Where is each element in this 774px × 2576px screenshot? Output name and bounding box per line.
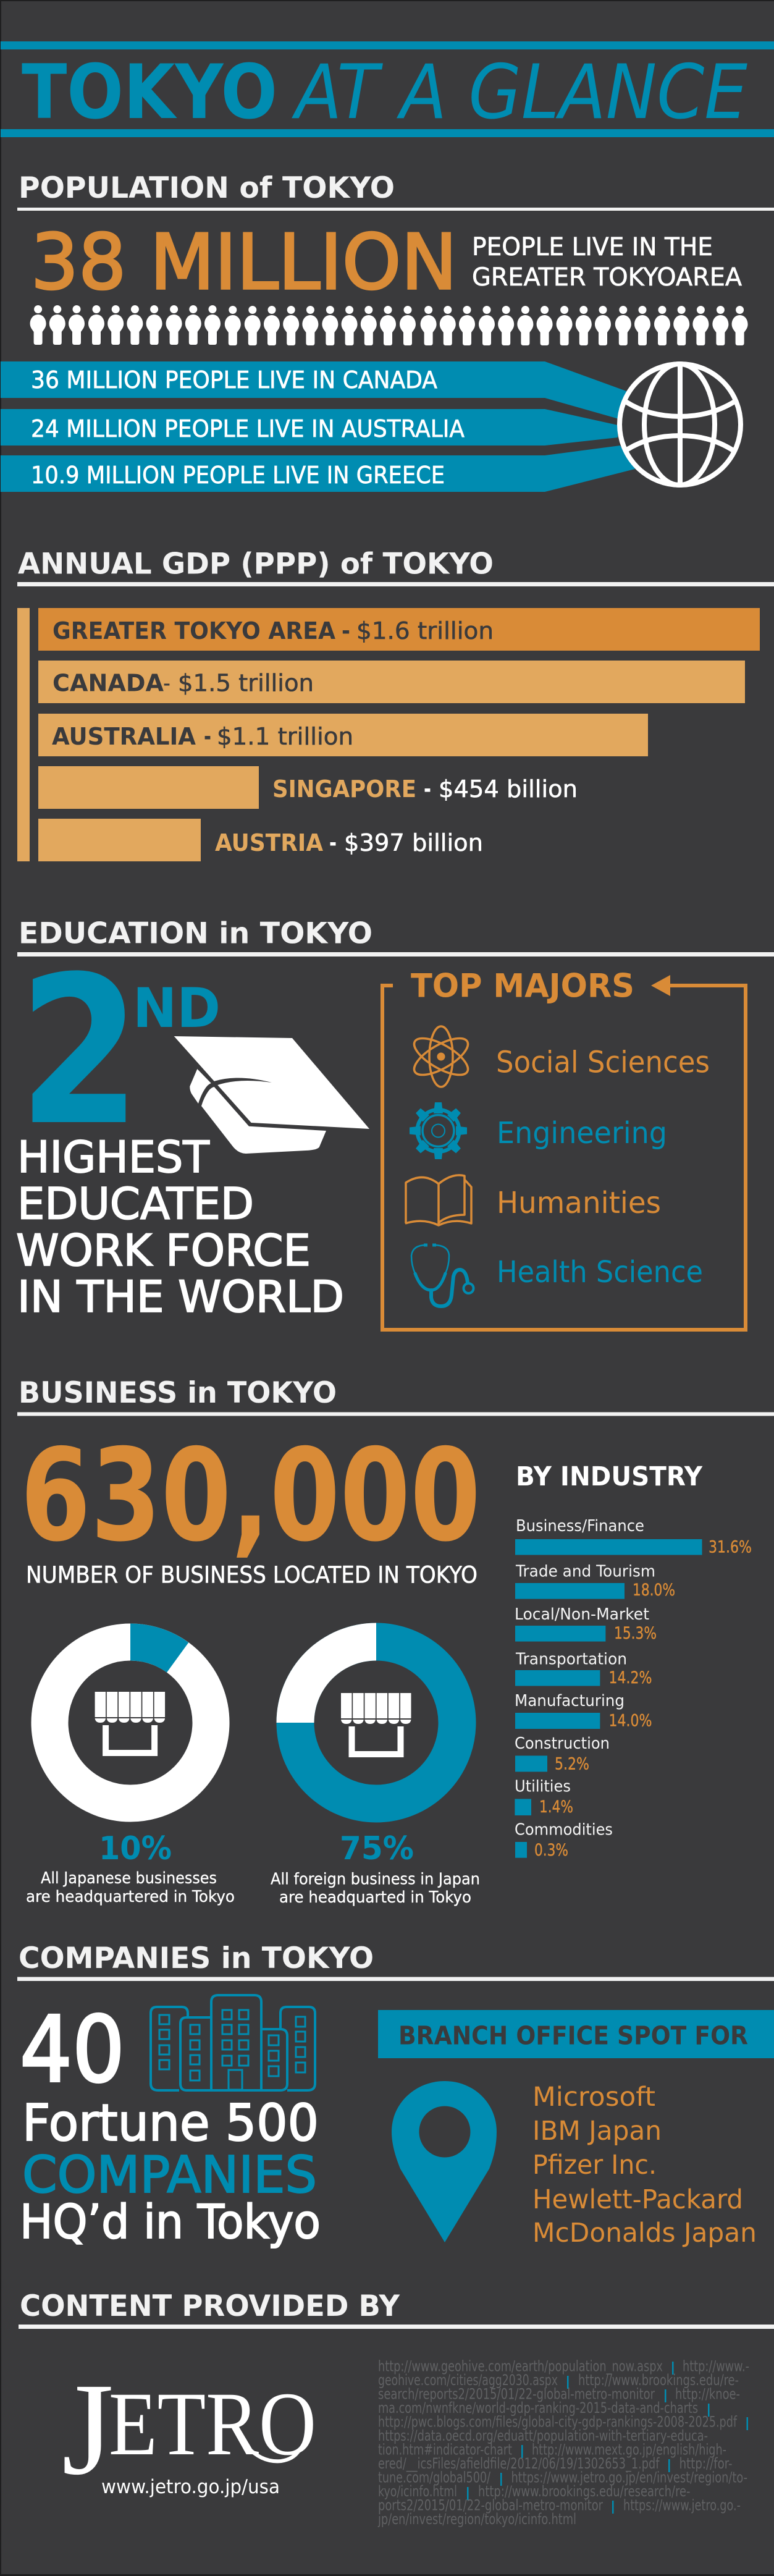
row: manufacturing: Manufacturing xyxy=(515,1692,625,1710)
row: utilities: Utilities xyxy=(515,1778,571,1796)
bar: Singapore: - xyxy=(424,775,431,803)
text block: sources: http://www.brookings.edu/research/re- xyxy=(478,2483,691,2500)
caption: foreign business xyxy=(271,1870,480,1907)
section heading: companies: COMPANIES in TOKYO xyxy=(19,1941,374,1975)
section heading: content provided by: CONTENT PROVIDED BY xyxy=(20,2289,400,2323)
list: companies: IBM Japan xyxy=(532,2116,662,2147)
big number: 40: 40 xyxy=(20,1997,125,2103)
row: trade and tourism: Trade and Tourism xyxy=(515,1563,655,1581)
icon: atom xyxy=(409,1026,473,1087)
panel: 2nd highest educated work force xyxy=(16,933,369,1322)
text: HQ'd in Tokyo: HQ’d in Tokyo xyxy=(20,2194,321,2249)
banner: Australia xyxy=(1,409,618,446)
row: business/finance: 31.6% xyxy=(709,1538,752,1557)
section heading: population xyxy=(17,171,774,211)
caption: people live in greater Tokyo: PEOPLE LIVE IN THE xyxy=(472,233,713,261)
icon: map pin xyxy=(392,2081,497,2242)
caption: foreign business: are headquarted in Tokyo xyxy=(279,1888,471,1907)
section heading: business xyxy=(17,1376,774,1416)
row: trade and tourism xyxy=(515,1563,675,1600)
banner: Greece: 10.9 MILLION PEOPLE LIVE IN GREECE xyxy=(31,462,445,489)
bar: Canada: CANADA xyxy=(53,670,164,697)
caption: people live in greater Tokyo: GREATER TOKYOAREA xyxy=(472,263,742,292)
bar: Australia: AUSTRALIA xyxy=(52,723,196,750)
icon: storefront xyxy=(95,1692,165,1756)
text block: sources: http://for- xyxy=(679,2455,733,2472)
icon: office buildings xyxy=(151,1995,315,2090)
logo: JETRO xyxy=(62,2356,316,2502)
text block: sources: tune.com/global500/ xyxy=(378,2468,491,2486)
bar: Greater Tokyo Area xyxy=(38,608,760,651)
text: COMPANIES: COMPANIES xyxy=(22,2146,317,2205)
icon: book xyxy=(405,1175,471,1225)
row: transportation: Transportation xyxy=(515,1650,627,1668)
caption: foreign business: All foreign business in Japan xyxy=(271,1870,480,1889)
bar: Canada: $1.5 trillion xyxy=(178,670,314,697)
bar: Singapore xyxy=(38,766,578,809)
big number: 38 MILLION: 38 MILLION xyxy=(31,219,457,307)
text: JETRO url: www.jetro.go.jp/usa xyxy=(101,2476,280,2498)
heading: by industry: BY INDUSTRY xyxy=(516,1461,703,1492)
bar: Canada: - xyxy=(163,670,170,697)
banner: branch office spot for: BRANCH OFFICE SPOT FOR xyxy=(398,2021,748,2051)
text block: sources: http://knoe- xyxy=(675,2385,740,2402)
banner: Canada xyxy=(1,361,626,419)
big number: 2: 2 xyxy=(19,933,141,1171)
row: utilities xyxy=(515,1778,573,1817)
title: TOKYO: TOKYO xyxy=(22,49,277,136)
section heading: companies xyxy=(17,1941,774,1981)
list: companies: Pfizer Inc. xyxy=(532,2150,657,2181)
banner: Australia: 24 MILLION PEOPLE LIVE IN AUSTRALIA xyxy=(31,415,465,442)
text: highest educated work force in the world: EDUCATED xyxy=(17,1179,254,1230)
text block: sources: ports2/2015/01/22-global-metro-monitor xyxy=(378,2496,603,2514)
row: local/non-market xyxy=(515,1605,657,1643)
text block: sources: geohive.com/cities/agg2030.aspx xyxy=(378,2371,558,2389)
section heading: GDP: ANNUAL GDP (PPP) of TOKYO xyxy=(18,547,494,581)
banner: branch office spot for xyxy=(378,2010,774,2058)
superscript: ND: ND xyxy=(133,976,221,1040)
section heading: business: BUSINESS in TOKYO xyxy=(19,1376,337,1410)
caption: Japanese businesses: All Japanese businesses xyxy=(41,1869,217,1888)
bar: Austria xyxy=(38,819,483,861)
section heading: population: POPULATION of TOKYO xyxy=(19,171,395,205)
row: transportation: 14.2% xyxy=(609,1668,652,1687)
label: engineering: Engineering xyxy=(497,1116,667,1151)
row: construction: Construction xyxy=(515,1734,610,1753)
text block: sources: http://www.geohive.com/earth/population_now.aspx xyxy=(378,2357,663,2375)
bar: Singapore: SINGAPORE xyxy=(272,775,416,803)
list: companies: Microsoft xyxy=(532,2082,655,2113)
panel: fortune 500 companies xyxy=(20,1995,321,2249)
text: Fortune 500: Fortune 500 xyxy=(22,2094,319,2153)
row: construction xyxy=(515,1734,610,1774)
panel: population xyxy=(1,219,748,492)
donut chart: 10% of Japanese businesses xyxy=(49,1624,211,1803)
panel: by industry xyxy=(515,1461,752,1860)
bar: Austria: $397 billion xyxy=(344,829,483,856)
row: local/non-market: Local/Non-Market xyxy=(515,1605,649,1624)
list: companies: Hewlett-Packard xyxy=(532,2184,743,2215)
icon: globe xyxy=(620,364,741,485)
text block: sources xyxy=(377,2357,749,2528)
bar: Australia: - xyxy=(204,723,211,750)
text: highest educated work force in the world: WORK FORCE xyxy=(16,1225,311,1276)
row: trade and tourism: 18.0% xyxy=(633,1581,675,1600)
frame with arrow xyxy=(382,975,746,1330)
row: construction: 5.2% xyxy=(555,1755,589,1774)
bar: Australia xyxy=(38,714,648,756)
row: manufacturing: 14.0% xyxy=(609,1712,652,1731)
text block: sources: jp/en/invest/region/tokyo/icinfo.html xyxy=(377,2511,576,2528)
icon: storefront xyxy=(341,1693,411,1757)
caption: Japanese businesses xyxy=(26,1869,235,1906)
section heading: education: EDUCATION in TOKYO xyxy=(19,917,372,950)
row: commodities: 0.3% xyxy=(534,1841,568,1860)
row: local/non-market: 15.3% xyxy=(614,1624,657,1643)
stat: 75%: 75% xyxy=(340,1830,414,1867)
row: business/finance xyxy=(515,1517,752,1557)
caption: number of business: NUMBER OF BUSINESS LOCATED IN TOKYO xyxy=(26,1562,477,1589)
list: companies: McDonalds Japan xyxy=(532,2218,757,2249)
row: business/finance: Business/Finance xyxy=(516,1517,644,1535)
text: highest educated work force in the world: HIGHEST xyxy=(17,1132,209,1183)
section heading: GDP xyxy=(17,547,774,586)
icon: graduation cap xyxy=(174,1036,369,1154)
big number: 630,000: 630,000 xyxy=(20,1422,481,1570)
bar: Austria: - xyxy=(329,829,337,856)
text block: sources: search/reports2/2015/01/22-global-metro-monitor xyxy=(378,2385,655,2402)
row: transportation xyxy=(515,1650,652,1687)
text block: sources: kyo/icinfo.html xyxy=(378,2483,457,2500)
row: commodities xyxy=(515,1821,613,1860)
logo: JETRO: J xyxy=(62,2356,114,2502)
list: companies xyxy=(532,2082,757,2249)
icon: gear xyxy=(410,1102,467,1159)
panel: branch office spot xyxy=(378,2010,774,2249)
heading: top majors: TOP MAJORS xyxy=(411,968,634,1005)
bar: Singapore: $454 billion xyxy=(439,775,578,803)
bar: Australia: $1.1 trillion xyxy=(217,723,353,750)
label: social sciences: Social Sciences xyxy=(496,1045,710,1080)
row: manufacturing xyxy=(515,1692,652,1731)
section heading: education xyxy=(17,917,774,956)
icon: stethoscope xyxy=(411,1245,473,1306)
bar: Canada xyxy=(38,661,745,703)
chart: GDP bars xyxy=(17,608,760,861)
row: commodities: Commodities xyxy=(515,1821,613,1839)
section heading: content provided by xyxy=(19,2289,774,2329)
caption: Japanese businesses: are headquartered in Tokyo xyxy=(26,1888,235,1906)
text: highest educated work force in the world: IN THE WORLD xyxy=(17,1272,344,1322)
donut chart: 75% of foreign business xyxy=(277,1623,457,1804)
label: humanities: Humanities xyxy=(497,1186,661,1220)
logo: JETRO: ETRO xyxy=(109,2373,316,2474)
bar: Greater Tokyo Area: $1.6 trillion xyxy=(356,617,494,644)
bar: Greater Tokyo Area: - xyxy=(342,617,350,644)
bar: Greater Tokyo Area: GREATER TOKYO AREA xyxy=(53,617,336,644)
icon row: people xyxy=(30,305,748,345)
panel: top majors xyxy=(382,968,746,1330)
caption: people live in greater Tokyo xyxy=(472,233,742,292)
text block: sources: http://www.- xyxy=(683,2357,749,2375)
text: highest educated work force in the world xyxy=(16,1132,344,1322)
title banner xyxy=(1,41,774,137)
text block: sources: ered/__icsFiles/afieldfile/2012/06/19/1302653_1.pdf xyxy=(378,2455,660,2472)
row: utilities: 1.4% xyxy=(539,1797,573,1817)
banner: Canada: 36 MILLION PEOPLE LIVE IN CANADA xyxy=(31,366,437,394)
banner: Greece xyxy=(1,446,635,492)
label: health science: Health Science xyxy=(497,1255,703,1290)
text block: sources: tion.htm#indicator-chart xyxy=(378,2441,512,2458)
bar: Austria: AUSTRIA xyxy=(215,829,324,856)
stat: 10%: 10% xyxy=(99,1830,172,1867)
